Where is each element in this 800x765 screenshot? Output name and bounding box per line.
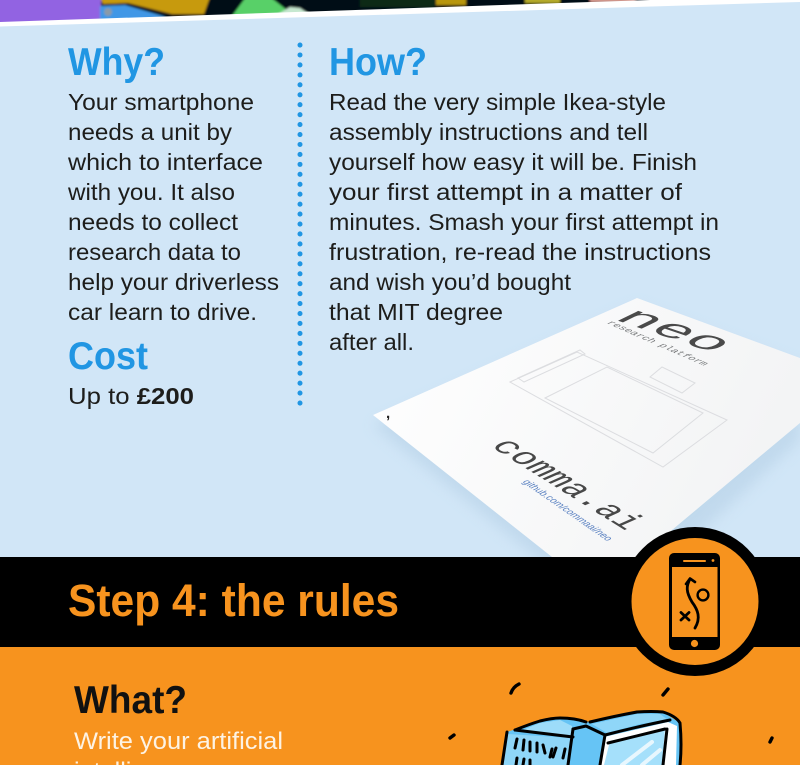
heading: how: How? bbox=[329, 41, 427, 84]
text block: how body: frustration, re-read the instructions bbox=[329, 239, 711, 265]
text block: why body: Your smartphone bbox=[68, 89, 254, 115]
panel: orange rules section bbox=[0, 647, 800, 765]
dotted column divider bbox=[298, 45, 302, 404]
text block: what body: Write your artificial bbox=[74, 728, 283, 755]
text block: cost value: Up to £200 bbox=[68, 383, 194, 409]
text block: how body: that MIT degree bbox=[329, 299, 503, 325]
manual subtitle: research platform bbox=[603, 320, 711, 367]
illustration: neo assembly manual bbox=[373, 298, 800, 570]
text block: how body: and wish you’d bought bbox=[329, 269, 571, 295]
text block: how body: your first attempt in a matter of bbox=[329, 179, 683, 205]
text block: why body: which to interface bbox=[67, 149, 263, 175]
column: how bbox=[329, 41, 719, 355]
heading: what: What? bbox=[74, 679, 187, 722]
manual brand: comma.ai bbox=[479, 434, 653, 535]
text block: how body: yourself how easy it will be. Finish bbox=[329, 149, 697, 175]
schematic outline bbox=[510, 350, 727, 467]
manual link: github.com/commaai/neo bbox=[519, 478, 615, 542]
illustration: computer monitor bbox=[501, 712, 681, 765]
text block: how body: minutes. Smash your first attempt in bbox=[329, 209, 719, 235]
icon: phone with playbook bbox=[620, 527, 770, 676]
text block: why body: car learn to drive. bbox=[68, 299, 257, 325]
black heading band bbox=[0, 557, 800, 647]
manual comma mark: , bbox=[386, 405, 390, 422]
text block: why body: needs a unit by bbox=[68, 119, 232, 145]
header photo strip bbox=[0, 0, 800, 27]
text block: how body: Read the very simple Ikea-style bbox=[329, 89, 666, 115]
text block: how body: assembly instructions and tell bbox=[329, 119, 648, 145]
text block: how body: after all. bbox=[329, 329, 414, 355]
text block: why body: needs to collect bbox=[68, 209, 238, 235]
text block: how body bbox=[329, 89, 719, 355]
manual title: neo bbox=[601, 304, 745, 359]
icon: sparkle ticks bbox=[450, 684, 772, 742]
column: why bbox=[67, 41, 279, 409]
text block: why body: research data to bbox=[68, 239, 241, 265]
heading: why: Why? bbox=[68, 41, 165, 84]
text block: why body: with you. It also bbox=[67, 179, 235, 205]
text block: why body bbox=[67, 89, 279, 325]
text block: what body bbox=[74, 728, 283, 765]
heading: step 4: Step 4: the rules bbox=[68, 575, 399, 626]
text block: why body: help your driverless bbox=[68, 269, 279, 295]
heading: cost: Cost bbox=[68, 335, 148, 378]
